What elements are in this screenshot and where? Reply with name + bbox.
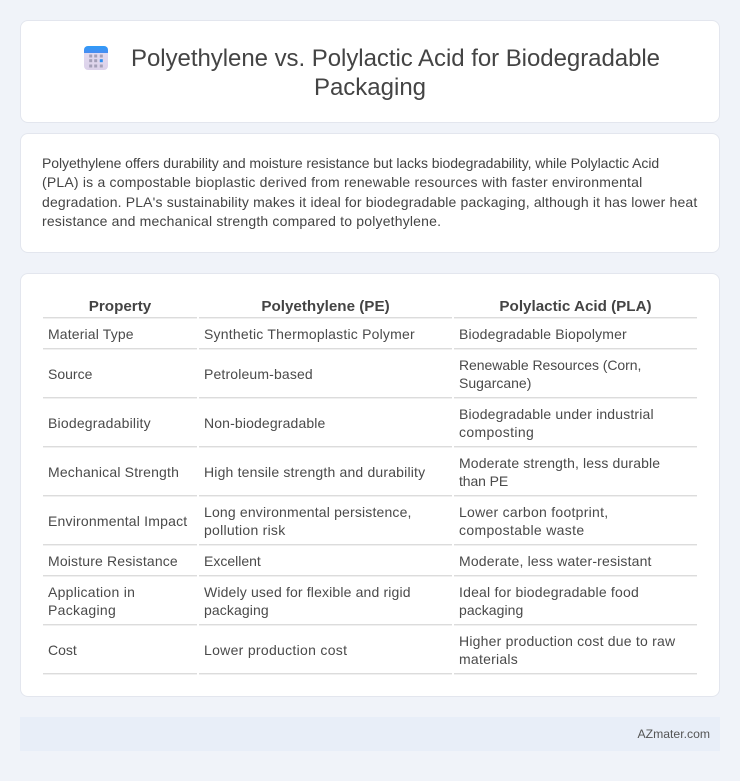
row: cost: [48, 633, 676, 667]
row: application in packaging: Packaging: [48, 602, 116, 618]
row: moisture resistance: Moisture Resistance: [48, 553, 178, 569]
panel: comparison table card: [20, 273, 720, 697]
row: biodegradability: Biodegradable under industrial: [459, 406, 654, 422]
row: environmental impact: [48, 504, 608, 538]
summary text: degradation. PLA's sustainability makes it ideal for biodegradable packaging, although it has lower heat: [42, 194, 697, 210]
row: environmental impact: Lower carbon footprint,: [459, 504, 608, 520]
icon: calendar: [84, 46, 108, 70]
title: [131, 45, 660, 101]
row: moisture resistance: [48, 553, 652, 569]
row: moisture resistance: Moderate, less water-resistant: [459, 553, 652, 569]
panel: title card: [20, 20, 720, 123]
row: biodegradability: composting: [459, 424, 534, 440]
row: environmental impact: Long environmental persistence,: [204, 504, 412, 520]
row: mechanical strength: than PE: [459, 473, 508, 489]
row: biodegradability: Non-biodegradable: [204, 415, 325, 431]
title: Polyethylene vs. Polylactic Acid for Biodegradable: [131, 45, 660, 72]
row: material type: Material Type: [48, 326, 134, 342]
row: application in packaging: Ideal for biodegradable food: [459, 584, 639, 600]
row: source: [48, 357, 641, 391]
row: cost: Higher production cost due to raw: [459, 633, 675, 649]
table header: Polyethylene (PE): [261, 298, 390, 315]
summary text: (PLA) is a compostable bioplastic derived from renewable resources with faster environmental: [42, 174, 642, 190]
row: environmental impact: compostable waste: [459, 522, 584, 538]
table header: Property: [89, 298, 151, 315]
row: moisture resistance: Excellent: [204, 553, 261, 569]
row: cost: Cost: [48, 642, 77, 658]
row: environmental impact: pollution risk: [204, 522, 285, 538]
row: mechanical strength: High tensile strength and durability: [204, 464, 425, 480]
row: biodegradability: Biodegradability: [48, 415, 151, 431]
row: application in packaging: Widely used for flexible and rigid: [204, 584, 411, 600]
row: environmental impact: Environmental Impact: [48, 513, 187, 529]
footer text: source: AZmater.com: [638, 727, 710, 741]
row: source: Petroleum-based: [204, 366, 313, 382]
row: source: Renewable Resources (Corn,: [459, 357, 641, 373]
row: mechanical strength: Moderate strength, less durable: [459, 455, 660, 471]
comparison table: [43, 298, 697, 675]
row: application in packaging: Application in: [48, 584, 135, 600]
row: material type: Synthetic Thermoplastic Polymer: [204, 326, 415, 342]
row: application in packaging: packaging: [204, 602, 269, 618]
row: mechanical strength: [48, 455, 660, 489]
title: Packaging: [314, 74, 426, 101]
table header: Polylactic Acid (PLA): [499, 298, 652, 315]
row: material type: Biodegradable Biopolymer: [459, 326, 627, 342]
row: source: Source: [48, 366, 92, 382]
summary text: Polyethylene offers durability and moisture resistance but lacks biodegradability, while Polylactic Acid: [42, 155, 659, 171]
row: material type: [48, 326, 627, 342]
summary text: [42, 155, 698, 229]
row: mechanical strength: Mechanical Strength: [48, 464, 179, 480]
row: application in packaging: packaging: [459, 602, 523, 618]
panel: summary card: [20, 133, 720, 253]
table header: [89, 298, 652, 315]
footer bar: [20, 717, 720, 751]
row: application in packaging: [48, 584, 639, 618]
summary text: resistance and mechanical strength compared to polyethylene.: [42, 213, 441, 229]
row: biodegradability: [48, 406, 654, 440]
row: source: Sugarcane): [459, 375, 531, 391]
row: cost: materials: [459, 651, 518, 667]
row: cost: Lower production cost: [204, 642, 347, 658]
